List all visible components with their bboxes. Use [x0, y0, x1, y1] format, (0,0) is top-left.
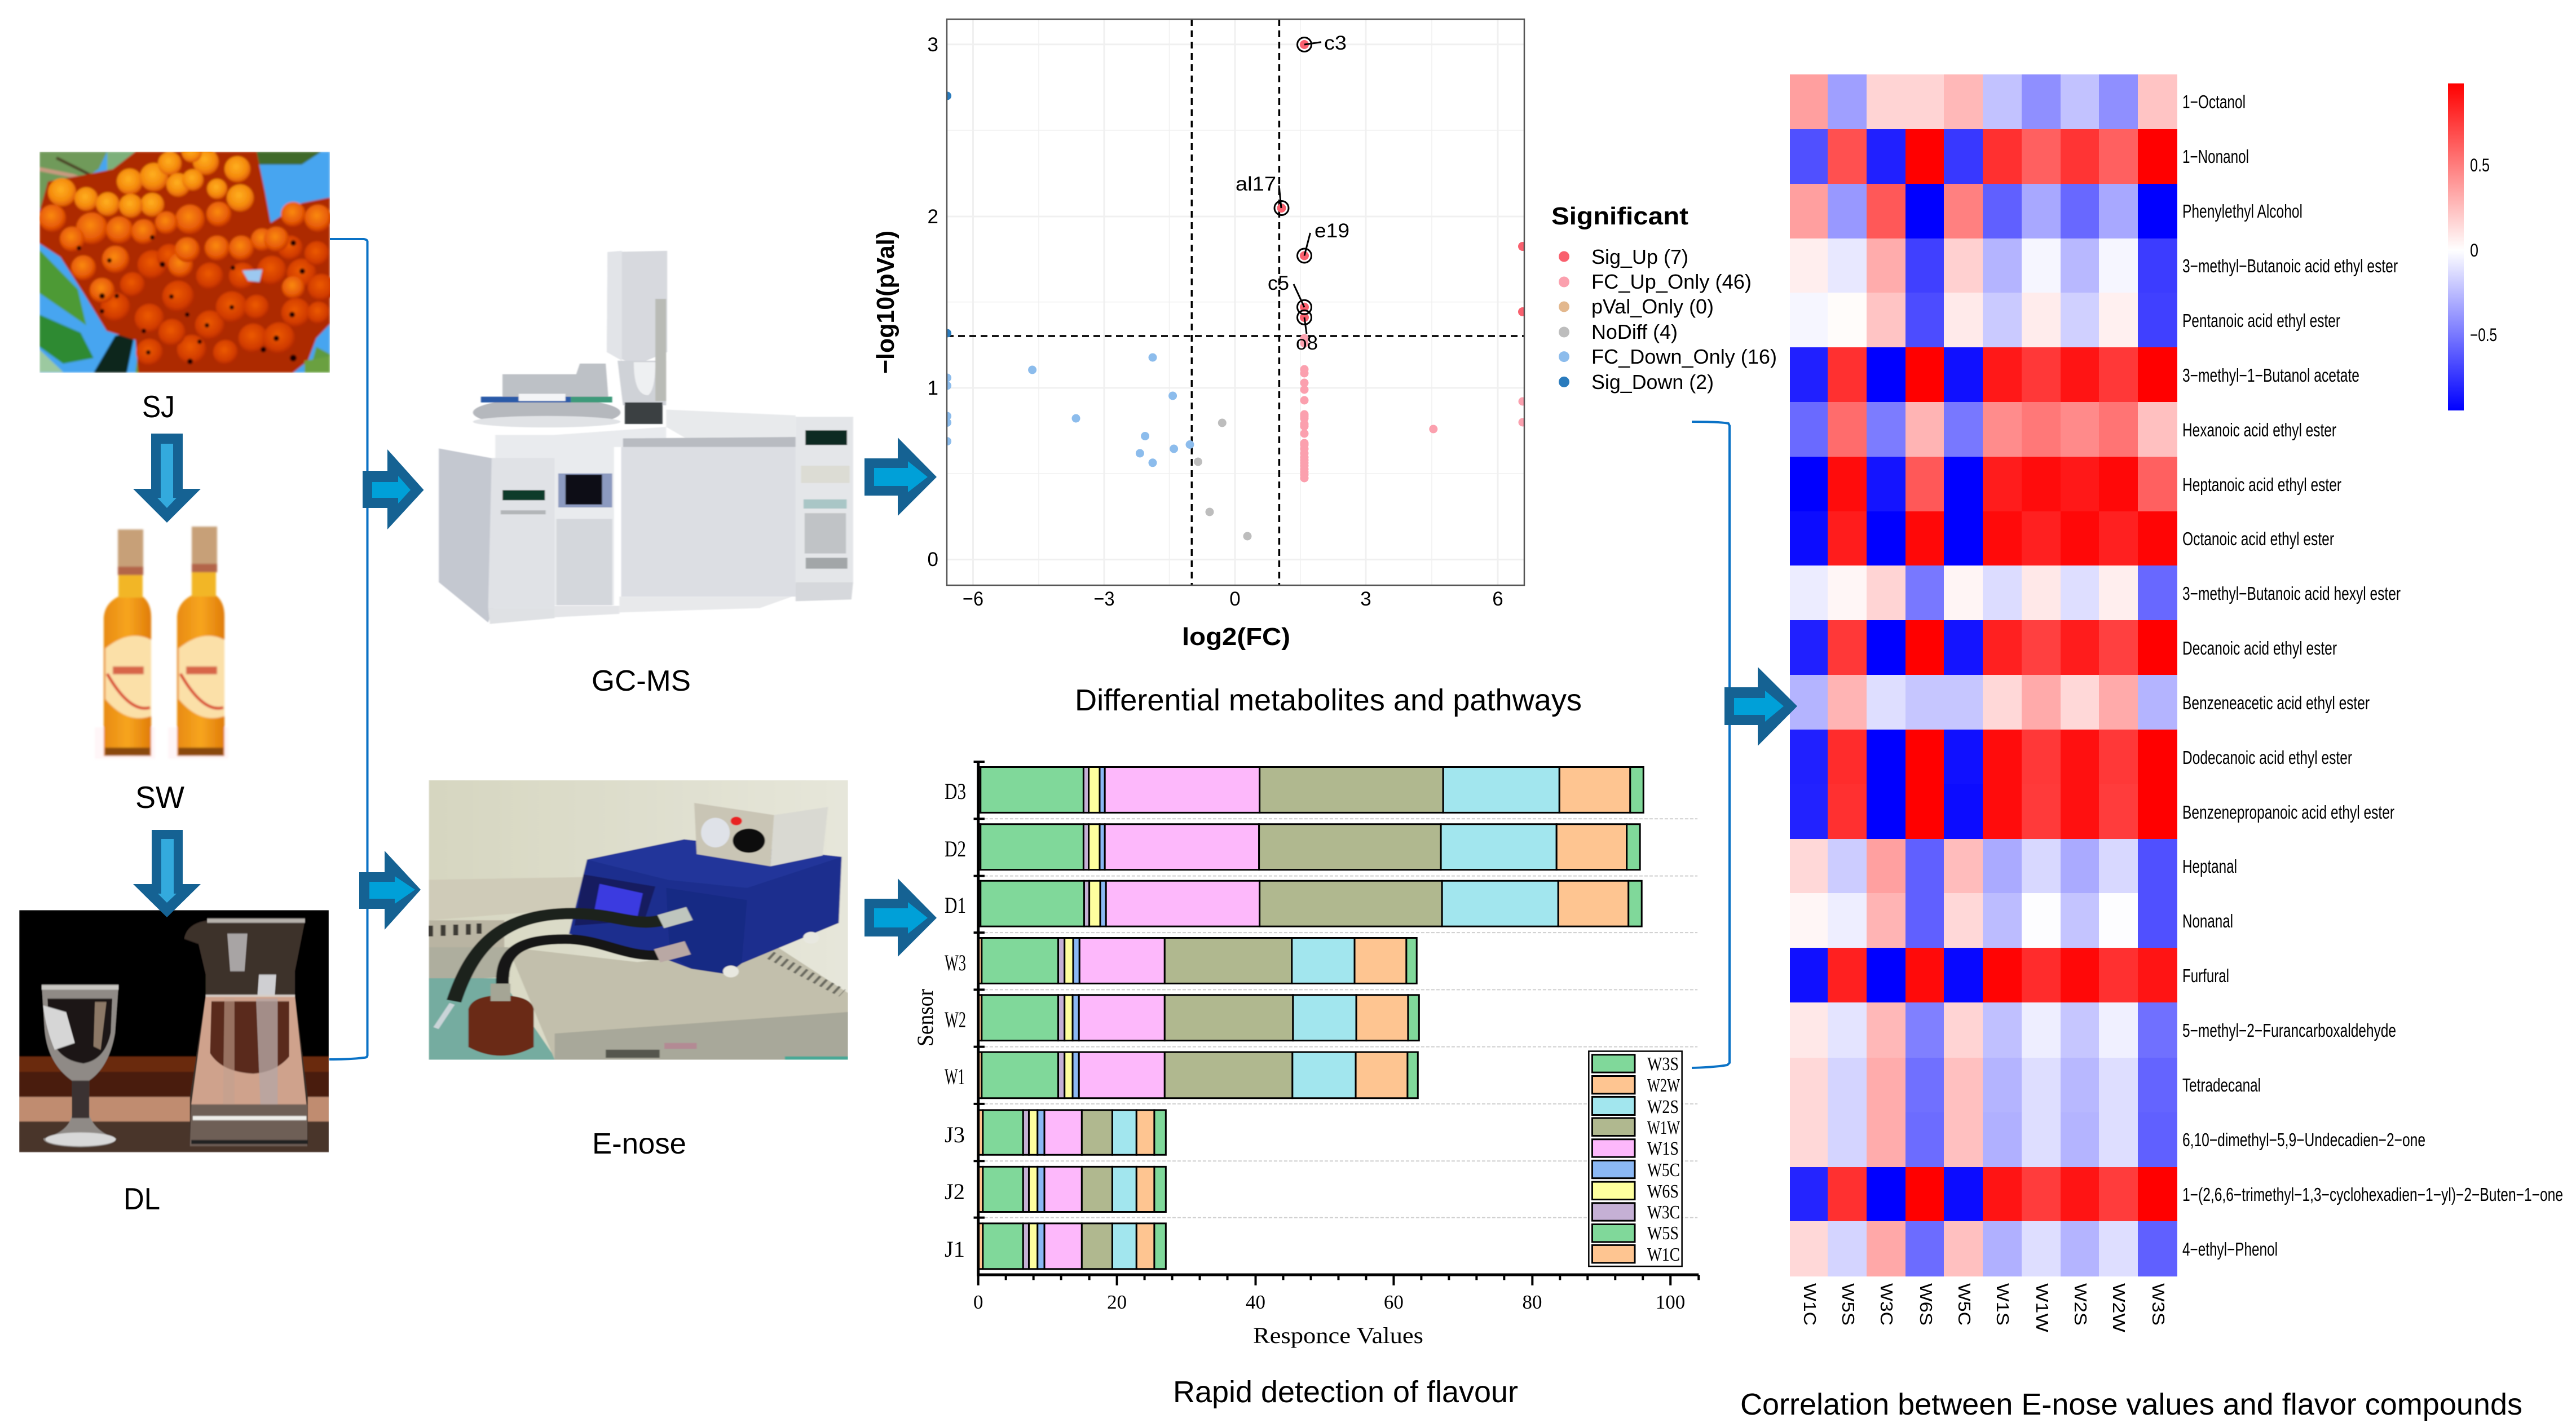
- gauge box: [694, 803, 828, 867]
- heatmap compound labels: Octanoic acid ethyl ester: [2182, 528, 2334, 549]
- grid lines: [947, 19, 1524, 585]
- row: Furfural: [1790, 948, 2177, 1003]
- bar W1: [978, 1052, 1418, 1098]
- heatmap compound labels: 3−methyl−Butanoic acid ethyl ester: [2182, 255, 2398, 276]
- row: Benzeneacetic acid ethyl ester: [1790, 675, 2177, 730]
- plot frame: [947, 19, 1524, 585]
- legend swatches: [1589, 1051, 1682, 1266]
- heatmap sensor labels: W3C: [1877, 1283, 1896, 1326]
- MS body: [439, 448, 619, 624]
- autosampler tray: [473, 364, 663, 427]
- heatmap sensor labels: W2W: [2109, 1283, 2129, 1333]
- heatmap colour scale: 0: [2470, 240, 2478, 260]
- significant up points: [1277, 40, 1527, 322]
- legend labels: NoDiff (4): [1591, 320, 1678, 343]
- heatmap compound labels: Nonanal: [2182, 911, 2233, 931]
- bar D3: [978, 767, 1643, 812]
- heatmap sensor labels: W1W: [2032, 1283, 2052, 1333]
- heatmap compound labels: 1−Octanol: [2182, 91, 2246, 112]
- heatmap compound labels: Heptanoic acid ethyl ester: [2182, 474, 2341, 495]
- value axis numbers: 20: [1107, 1291, 1127, 1313]
- brown sample jar: [468, 984, 534, 1056]
- x axis ticks: −6: [963, 588, 983, 610]
- category labels: J2: [945, 1179, 965, 1204]
- label leader lines: [1279, 42, 1321, 334]
- autosampler tower: [607, 251, 667, 405]
- arrow: samples to GC-MS: [363, 449, 424, 529]
- legend labels: W2W: [1647, 1075, 1680, 1096]
- heatmap sensor labels: W6S: [1916, 1283, 1936, 1326]
- heatmap sensor labels: [1800, 1283, 2168, 1333]
- heatmap compound labels: Heptanal: [2182, 856, 2237, 877]
- heatmap compound labels: Benzenepropanoic acid ethyl ester: [2182, 802, 2394, 823]
- wine glass: [42, 985, 118, 1147]
- legend labels: [1591, 245, 1777, 394]
- y axis ticks: 2: [928, 206, 938, 228]
- photo: E-nose instrument: [429, 780, 848, 1059]
- central column: [495, 427, 666, 605]
- point labels: [1236, 32, 1349, 354]
- row separators: [985, 819, 1697, 1218]
- threshold lines: [947, 19, 1524, 585]
- heatmap compound labels: Tetradecanal: [2182, 1075, 2261, 1095]
- arrow: samples to E-nose: [359, 851, 421, 930]
- heatmap sensor labels: W1C: [1800, 1283, 1820, 1326]
- category labels: D3: [945, 779, 966, 804]
- bar D1: [978, 881, 1642, 926]
- connector: samples to instruments: [329, 239, 368, 1059]
- bar W2: [978, 995, 1419, 1041]
- heatmap compound labels: Benzeneacetic acid ethyl ester: [2182, 692, 2370, 713]
- y axis ticks: 0: [928, 549, 938, 571]
- heatmap colour scale: −0.5: [2470, 325, 2497, 345]
- heatmap compound labels: 1−Nonanol: [2182, 146, 2249, 167]
- bar W3: [978, 938, 1417, 983]
- row: Heptanal: [1790, 839, 2177, 894]
- legend labels: [1647, 1054, 1680, 1265]
- legend labels: pVal_Only (0): [1591, 295, 1714, 318]
- volcano legend: [1551, 202, 1777, 394]
- category labels: W2: [945, 1007, 966, 1032]
- x axis ticks: 6: [1492, 588, 1503, 610]
- heatmap sensor labels: W5C: [1955, 1283, 1974, 1326]
- bars: [978, 767, 1643, 1269]
- row: Phenylethyl Alcohol: [1790, 184, 2177, 239]
- heatmap colour scale: 0.5: [2470, 155, 2490, 175]
- row: 3-methyl-1-Butanol acetate: [1790, 347, 2177, 403]
- point labels: c3: [1324, 32, 1347, 54]
- heatmap colour scale: [2448, 83, 2497, 410]
- point labels: al17: [1236, 173, 1276, 195]
- y axis title: −log10(pVal): [872, 231, 899, 374]
- photo: distilled liquor glass and pitcher: [19, 910, 329, 1152]
- heatmap compound labels: Phenylethyl Alcohol: [2182, 201, 2302, 222]
- row: Heptanoic acid ethyl ester: [1790, 457, 2177, 512]
- row: Decanoic acid ethyl ester: [1790, 620, 2177, 675]
- legend labels: Sig_Down (2): [1591, 370, 1714, 394]
- correlation heatmap: [1790, 74, 2177, 1276]
- highlighted point rings: [1274, 37, 1312, 325]
- category labels: D2: [945, 836, 966, 861]
- value axis numbers: 100: [1656, 1291, 1685, 1313]
- category labels: W1: [945, 1064, 965, 1089]
- FC up only points: [1300, 334, 1527, 483]
- category labels: J3: [945, 1122, 965, 1147]
- point labels: o8: [1296, 332, 1318, 354]
- hoses: [436, 913, 690, 1028]
- heatmap compound labels: Hexanoic acid ethyl ester: [2182, 419, 2336, 440]
- photo: sea buckthorn berries: [39, 142, 335, 373]
- x axis ticks: −3: [1094, 588, 1114, 610]
- category labels: [945, 779, 966, 1262]
- heatmap compound labels: Pentanoic acid ethyl ester: [2182, 310, 2340, 331]
- legend labels: FC_Up_Only (46): [1591, 270, 1752, 293]
- photo: GC-MS instrument: [439, 251, 853, 624]
- heatmap compound labels: [2182, 91, 2563, 1260]
- legend labels: W5C: [1647, 1160, 1680, 1181]
- arrow: GC-MS to volcano plot: [864, 438, 937, 516]
- blue e-nose unit: [569, 840, 842, 978]
- bottle right: [177, 527, 224, 756]
- photo: bottles of sea buckthorn wine: [95, 527, 228, 759]
- gas chromatograph housing: [508, 947, 848, 1059]
- heatmap compound labels: Furfural: [2182, 965, 2229, 986]
- heatmap compound labels: Decanoic acid ethyl ester: [2182, 638, 2337, 659]
- bar J3: [978, 1110, 1166, 1155]
- legend labels: W1S: [1647, 1138, 1679, 1159]
- value axis numbers: [973, 1291, 1685, 1313]
- value axis numbers: 40: [1246, 1291, 1265, 1313]
- x axis title: log2(FC): [1182, 623, 1290, 651]
- legend labels: W5S: [1647, 1223, 1679, 1244]
- y axis ticks: 3: [928, 34, 938, 56]
- FC down only points: [943, 353, 1194, 467]
- label: DL: DL: [123, 1181, 160, 1216]
- GC body: [619, 410, 796, 612]
- heading: rapid detection: Rapid detection of flavour: [1173, 1375, 1518, 1409]
- legend title: Significant: [1551, 202, 1688, 230]
- label: GC-MS: GC-MS: [592, 665, 691, 697]
- bar J2: [978, 1167, 1166, 1212]
- heatmap sensor labels: W5S: [1838, 1283, 1858, 1326]
- legend labels: W2S: [1647, 1097, 1679, 1117]
- category axis title: Sensor: [912, 989, 938, 1046]
- y axis ticks: 1: [928, 377, 938, 399]
- row: Benzenepropanoic acid ethyl ester: [1790, 784, 2177, 840]
- x axis ticks: [963, 588, 1503, 610]
- data points: [943, 37, 1527, 540]
- heatmap compound labels: 4−ethyl−Phenol: [2182, 1239, 2278, 1260]
- volcano plot: [872, 19, 1527, 651]
- row: trimethyl cyclohexadienyl butenone: [1790, 1167, 2177, 1222]
- category labels: J1: [945, 1236, 965, 1262]
- heatmap sensor labels: W2S: [2071, 1283, 2090, 1326]
- chart axes: [974, 762, 1699, 1285]
- label: SW: SW: [135, 780, 184, 815]
- row: Nonanal: [1790, 893, 2177, 948]
- category labels: W3: [945, 950, 966, 975]
- row: 1-Octanol: [1790, 74, 2177, 130]
- x axis ticks: 0: [1229, 588, 1241, 610]
- value axis numbers: 0: [973, 1291, 983, 1313]
- heatmap compound labels: 3−methyl−Butanoic acid hexyl ester: [2182, 583, 2401, 604]
- bottle left: [104, 529, 151, 756]
- row: Octanoic acid ethyl ester: [1790, 511, 2177, 567]
- heading: correlation: Correlation between E-nose values and flavor compounds: [1740, 1388, 2522, 1421]
- legend labels: W3S: [1647, 1054, 1679, 1075]
- x axis ticks: 3: [1360, 588, 1371, 610]
- row: 3-methyl-Butanoic acid hexyl ester: [1790, 566, 2177, 621]
- row: 1-Nonanol: [1790, 129, 2177, 184]
- pitcher: [184, 921, 308, 1146]
- heatmap compound labels: 6,10−dimethyl−5,9−Undecadien−2−one: [2182, 1129, 2425, 1150]
- legend labels: W1W: [1647, 1117, 1680, 1138]
- arrow: charts to heatmap: [1724, 667, 1797, 746]
- heatmap compound labels: Dodecanoic acid ethyl ester: [2182, 747, 2352, 768]
- arrow: SJ to SW: [133, 434, 201, 523]
- heatmap sensor labels: W3S: [2149, 1283, 2168, 1326]
- legend labels: W1C: [1647, 1244, 1680, 1265]
- row: Tetradecanal: [1790, 1058, 2177, 1113]
- no-difference points: [1194, 418, 1252, 540]
- label: SJ: SJ: [142, 389, 175, 424]
- category labels: D1: [945, 893, 966, 918]
- y axis ticks: [928, 34, 938, 571]
- legend labels: W6S: [1647, 1181, 1679, 1202]
- heatmap compound labels: 3−methyl−1−Butanol acetate: [2182, 365, 2359, 386]
- row: 6,10-dimethyl-5,9-Undecadien-2-one: [1790, 1112, 2177, 1168]
- row: Pentanoic acid ethyl ester: [1790, 293, 2177, 348]
- point labels: e19: [1315, 220, 1349, 242]
- legend labels: Sig_Up (7): [1591, 245, 1688, 268]
- bar J1: [978, 1223, 1166, 1269]
- row: 5-methyl-2-Furancarboxaldehyde: [1790, 1002, 2177, 1058]
- row: 3-methyl-Butanoic acid ethyl ester: [1790, 238, 2177, 294]
- GC control panel: [796, 417, 853, 601]
- sensor legend: [1589, 1051, 1682, 1266]
- value axis numbers: 80: [1523, 1291, 1542, 1313]
- row: Dodecanoic acid ethyl ester: [1790, 730, 2177, 785]
- value axis numbers: 60: [1384, 1291, 1404, 1313]
- legend markers: [1559, 251, 1569, 387]
- arrow: SW to DL: [133, 830, 201, 917]
- significant down points: [943, 91, 951, 337]
- label: E-nose: E-nose: [592, 1128, 686, 1160]
- legend labels: W3C: [1647, 1202, 1680, 1223]
- stacked bar chart: [912, 762, 1699, 1348]
- point labels: c5: [1268, 272, 1289, 294]
- value axis title: Responce Values: [1253, 1323, 1423, 1348]
- row: 4-ethyl-Phenol: [1790, 1221, 2177, 1276]
- row: Hexanoic acid ethyl ester: [1790, 402, 2177, 457]
- legend labels: FC_Down_Only (16): [1591, 345, 1777, 368]
- heatmap sensor labels: W1S: [1993, 1283, 2013, 1326]
- arrow: E-nose to bar chart: [864, 878, 937, 957]
- heading: differential metabolites: Differential metabolites and pathways: [1075, 683, 1582, 717]
- bar D2: [978, 824, 1640, 870]
- heatmap compound labels: 5−methyl−2−Furancarboxaldehyde: [2182, 1020, 2396, 1041]
- connector: charts to heatmap: [1692, 422, 1730, 1068]
